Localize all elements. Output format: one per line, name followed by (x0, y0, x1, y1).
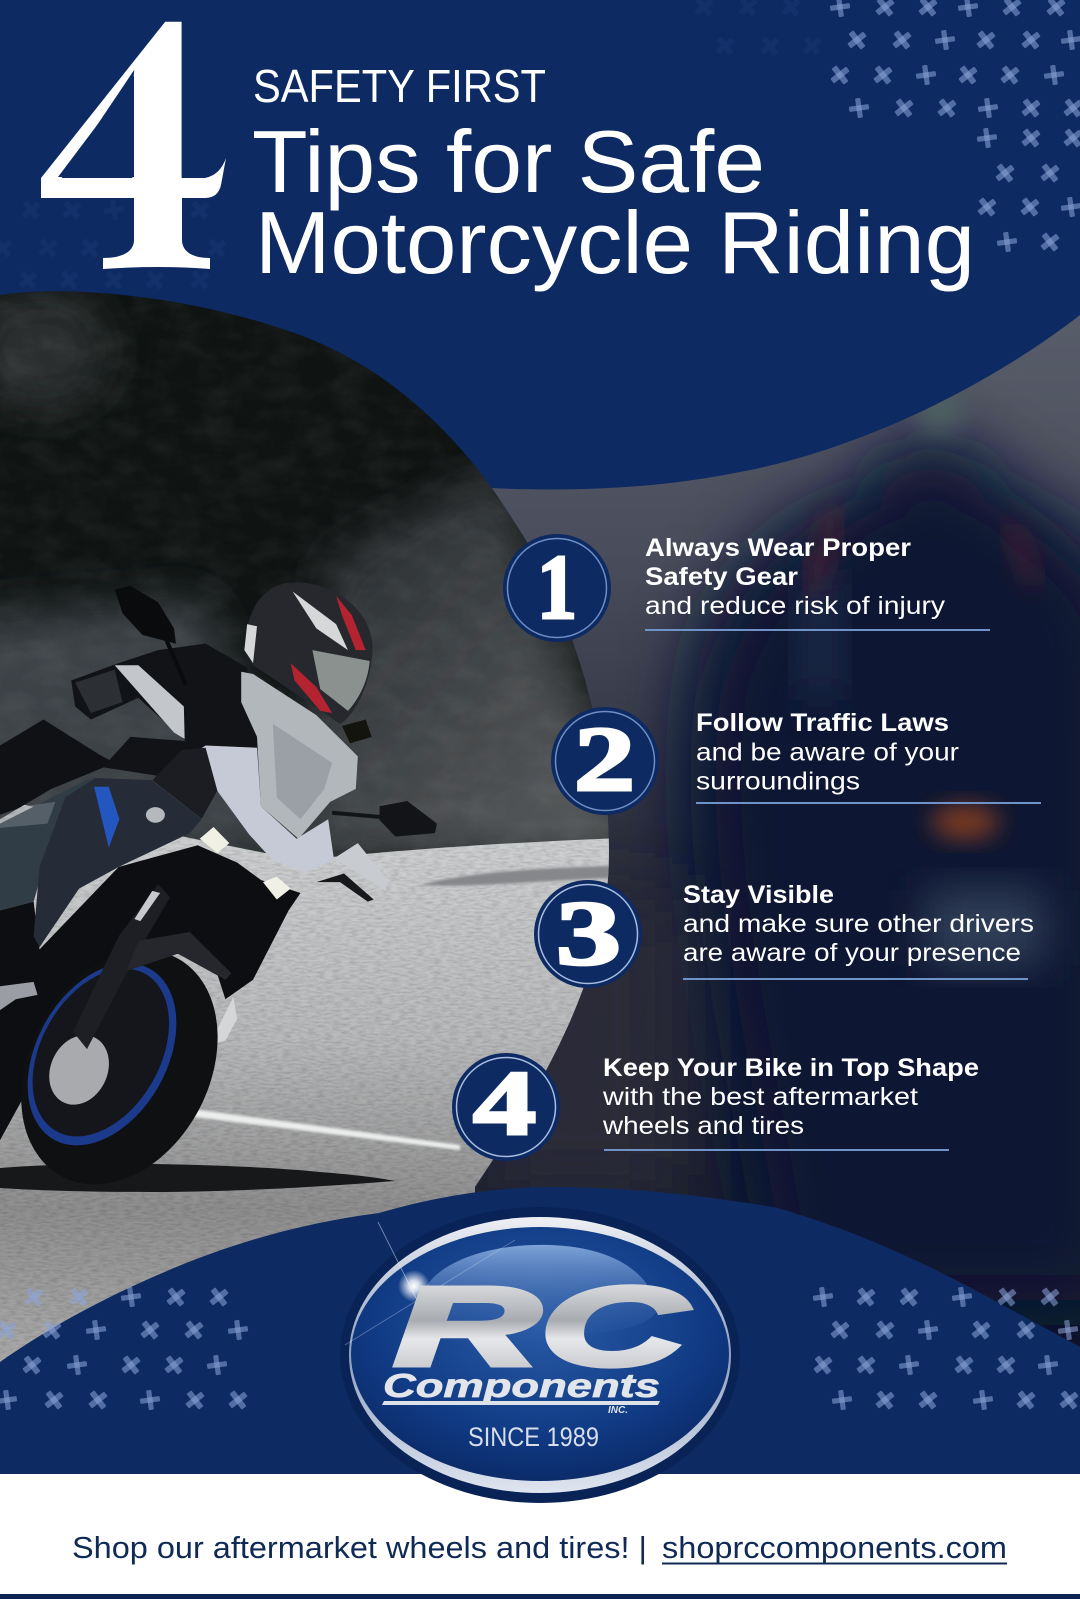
helmet red stripe (291, 596, 366, 713)
footer white band (0, 1474, 1080, 1600)
logo: RC Components (340, 1207, 740, 1503)
windscreen (241, 672, 358, 839)
tip 4 text (602, 1054, 979, 1150)
pattern: marks top right (830, 0, 1080, 252)
road shadow far (420, 866, 610, 886)
brake disc (49, 1036, 109, 1105)
fork (73, 884, 170, 1049)
brand badge (146, 807, 165, 823)
pattern: marks bottom left (0, 1287, 248, 1410)
white front fairing (152, 746, 334, 872)
glove highlight (75, 670, 123, 713)
rider leg (0, 776, 95, 910)
tip 2 text: and be aware of your (696, 738, 959, 766)
logo since 1989: SINCE 1989 (468, 1422, 599, 1452)
motorcycle drawn in local coordinates (0, 582, 437, 1226)
visor (312, 650, 370, 711)
white road line (170, 1106, 460, 1150)
tip 3 badge (534, 880, 642, 988)
tip 1 badge: 1 (537, 536, 577, 638)
hillside (0, 280, 620, 880)
tip 1 text: Always Wear Proper (645, 534, 911, 562)
title: Tips for Safe (252, 112, 765, 211)
tip 4 text: wheels and tires (602, 1112, 804, 1140)
pattern: faint marks top (694, 0, 822, 56)
tip 3 text: are aware of your presence (683, 939, 1021, 967)
tip 2 text: surroundings (696, 768, 860, 796)
tip 3 badge: 3 (556, 882, 621, 984)
tip 1 text: Safety Gear (645, 563, 798, 591)
panel: motorcycle photo (0, 280, 640, 1400)
dark tank fairing (34, 778, 202, 947)
tip 3 text: Stay Visible (683, 881, 834, 909)
tip 2 text (696, 709, 1041, 803)
footer call to action: shoprccomponents.com (662, 1530, 1007, 1565)
blue tank sticker (94, 787, 119, 847)
tip 2 badge: 2 (574, 708, 635, 810)
logo Components wordmark: Components (383, 1367, 660, 1404)
tip 2 text: Follow Traffic Laws (696, 709, 949, 737)
white hand guard (115, 665, 185, 739)
title (252, 112, 975, 292)
lower headlight (263, 877, 291, 899)
tip 1 text: and reduce risk of injury (645, 592, 946, 620)
tip 4 badge: 4 (473, 1052, 536, 1154)
front fender (127, 932, 231, 980)
right hand guard (334, 843, 387, 891)
panel: blurred rider photo background (0, 280, 1080, 1500)
bike ground shadow (0, 1164, 395, 1192)
footer bottom bar (0, 1594, 1080, 1599)
footer call to action: Shop our aftermarket wheels and tires! | (72, 1530, 647, 1565)
logo underline (382, 1401, 660, 1405)
panel: top navy header shape (0, 0, 1080, 489)
engine and lower body (0, 845, 301, 1140)
camera mount (342, 720, 372, 743)
tip 1 text (645, 534, 990, 630)
logo highlight (420, 1245, 658, 1347)
pale underside fairing (217, 998, 238, 1042)
title: Motorcycle Riding (255, 193, 975, 292)
tip 2 badge (551, 707, 659, 815)
rear bag (0, 720, 115, 819)
left mirror (115, 586, 176, 644)
front tyre (21, 956, 218, 1184)
blue rim (28, 966, 176, 1146)
tip 4 text: with the best aftermarket (602, 1083, 918, 1111)
eyebrow: safety first: SAFETY FIRST (253, 60, 546, 112)
road (0, 800, 620, 1400)
logo RC letters: RC (394, 1264, 690, 1389)
tip 3 text (683, 881, 1034, 979)
upper headlight (200, 827, 229, 853)
helmet (247, 582, 372, 724)
panel: bottom navy dome (0, 1187, 1080, 1474)
road texture (0, 806, 609, 1362)
tip 4 badge (452, 1052, 560, 1161)
logo inc: INC. (608, 1405, 628, 1416)
logo sparkle (345, 1222, 515, 1345)
rider jacket and arm (71, 644, 259, 776)
exhaust silver (0, 982, 38, 1010)
footer call to action (72, 1530, 1007, 1565)
tip 3 text: and make sure other drivers (683, 910, 1034, 938)
helmet white panel (244, 592, 348, 663)
pattern: marks bottom right (813, 1287, 1079, 1410)
tip 4 text: Keep Your Bike in Top Shape (603, 1054, 979, 1082)
tip 1 badge (503, 534, 611, 642)
dark fairing panel (152, 748, 217, 819)
right mirror (380, 801, 437, 837)
